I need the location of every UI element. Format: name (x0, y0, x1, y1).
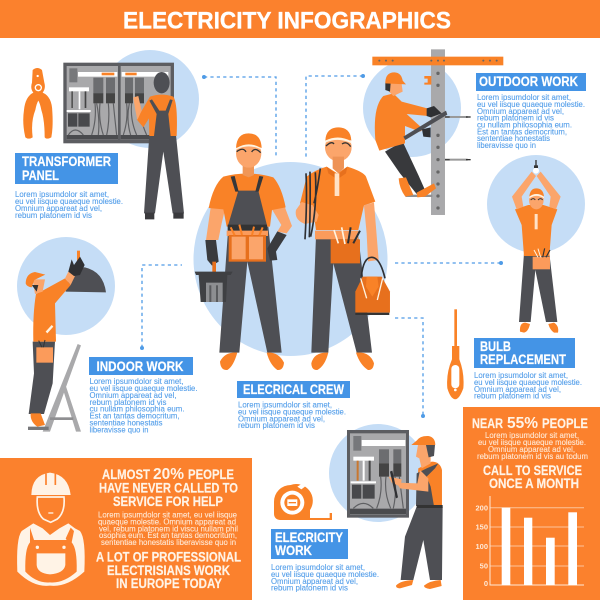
text: panel body (477, 430, 588, 461)
heading: almost 20%: SERVICE FOR HELP (113, 494, 223, 509)
header band with title (0, 0, 600, 38)
text: indoor work description: sententiae honestatis (90, 418, 162, 428)
icon: screwdriver (447, 309, 464, 399)
text: outdoor work description: rebum platonem id vis (477, 113, 554, 123)
text: panel body (98, 510, 238, 547)
text: crew description (238, 400, 346, 430)
text: indoor work description: Est an tantas democritum, (90, 411, 180, 421)
worker (389, 436, 443, 589)
utility pole (372, 49, 503, 215)
text: indoor work description: liberavisse quo in (90, 424, 149, 434)
label: indoor work: INDOOR WORK (96, 359, 184, 374)
text: bulb replacement description: Lorem ipsumdolor sit amet, (474, 370, 568, 380)
label: transformer panel: PANEL (22, 168, 59, 183)
heading: call to service: ONCE A MONTH (489, 476, 579, 491)
bar chart: 150 (475, 522, 488, 532)
bar chart: 100 (475, 542, 488, 551)
bulb replacement worker and screwdriver (447, 160, 561, 399)
text: panel body: sententiae honestatis liberavisse quo in (101, 537, 236, 547)
text: electricity work description: eu vel iisque quaeque molestie. (271, 569, 379, 579)
text: indoor work description: Lorem ipsumdolor sit amet, (90, 376, 184, 386)
label: electrical crew: ELECRICAL CREW (243, 382, 344, 397)
tool bucket (195, 262, 233, 302)
text: panel body: rebum platonem id vis au todum (477, 451, 588, 461)
heading: a lot of professional: IN EUROPE TODAY (116, 576, 222, 591)
heading: call to service (483, 463, 582, 491)
text: panel body: Omnium appareat ad vel, (488, 444, 575, 454)
heading: almost 20%: 20% (153, 466, 184, 483)
heading: a lot of professional: ELECTRISIANS WORK (107, 563, 230, 578)
step ladder (28, 344, 81, 432)
heading: near 55%: NEAR (472, 416, 503, 431)
bar chart: 0 (484, 579, 488, 588)
electricity work: cabinet, worker, tape measure (274, 430, 443, 589)
text: outdoor work description: sententiae honestatis (477, 133, 550, 143)
label: electricity work: ELECRICITY (275, 530, 343, 545)
text: transformer panel description (15, 189, 123, 220)
text: indoor work description: eu vel iisque quaeque molestie. (90, 383, 198, 393)
heading: almost 20%: ALMOST (102, 467, 151, 482)
bar chart (475, 496, 584, 588)
worker (26, 257, 85, 427)
text: bulb replacement description: rebum platonem id vis (474, 390, 551, 400)
text: outdoor work description: Est an tantas democritum, (477, 126, 567, 136)
bar chart: 50 (480, 562, 488, 570)
text: panel body: Lorem ipsumdolor sit amet, eu vel iisque (98, 510, 237, 520)
text: outdoor work description (477, 92, 585, 150)
bar chart: 200 (475, 504, 488, 512)
text: outdoor work description: liberavisse quo in (477, 140, 536, 150)
heading: near 55% (472, 415, 588, 432)
text: electricity work description: Omnium appareat ad vel, (271, 576, 358, 586)
text: panel body: quaeque molestie. Omnium appareat ad (98, 516, 236, 526)
text: transformer panel description: eu vel iisque quaeque molestie. (15, 196, 123, 206)
background circles (17, 50, 585, 522)
text: outdoor work description: eu vel iisque quaeque molestie. (477, 99, 585, 109)
left worker (195, 133, 292, 370)
indoor work: worker on ladder with lamp (26, 251, 106, 432)
transformer panel with worker (63, 63, 184, 219)
heading: almost 20%: PEOPLE (188, 467, 234, 482)
text: crew description: rebum platonem id vis (238, 420, 315, 430)
heading: a lot of professional (96, 550, 241, 591)
label: outdoor work: OUTDOOR WORK (479, 74, 578, 89)
heading: almost 20% (99, 466, 238, 509)
panel: 55% statistics (463, 407, 600, 600)
text: indoor work description: rebum platonem id vis (90, 397, 166, 407)
electrical crew figures (195, 127, 390, 370)
text: transformer panel description: Lorem ipsumdolor sit amet, (15, 189, 109, 199)
panel: 20% statistics (0, 458, 252, 600)
dashed connector lines (140, 74, 503, 418)
text: bulb replacement description: Omnium appareat ad vel, (474, 384, 561, 394)
icon: tape measure (274, 484, 332, 520)
heading: near 55%: PEOPLE (542, 416, 588, 431)
lineman (375, 72, 447, 197)
label: electricity work (271, 529, 348, 559)
ceiling lamp (66, 251, 106, 292)
label: bulb replacement (474, 338, 575, 368)
label: transformer panel (15, 153, 118, 184)
text: panel body: eu vel iisque quaeque molestie. (478, 437, 586, 447)
header band with title: ELECTRICITY INFOGRAPHICS (123, 8, 451, 34)
text: indoor work description (90, 376, 198, 434)
text: outdoor work description: Lorem ipsumdolor sit amet, (477, 92, 571, 102)
label: electricity work: WORK (275, 543, 312, 558)
text: electricity work description: rebum platonem id vis (271, 582, 348, 592)
text: crew description: eu vel iisque quaeque molestie. (238, 406, 346, 416)
text: electricity work description: Lorem ipsumdolor sit amet, (271, 562, 365, 572)
text: outdoor work description: Omnium appareat ad vel, (477, 106, 564, 116)
text: bulb replacement description: eu vel iisque quaeque molestie. (474, 377, 582, 387)
text: outdoor work description: cu nullam philosophia eum. (477, 120, 572, 130)
label: transformer panel: TRANSFORMER (22, 154, 111, 169)
text: bulb replacement description (474, 370, 582, 400)
text: panel body: vel, rebum platonem id viscu nullam phil (99, 523, 238, 533)
heading: almost 20%: HAVE NEVER CALLED TO (99, 481, 238, 496)
text: transformer panel description: rebum platonem id vis (15, 210, 92, 220)
electrical cabinet (63, 63, 174, 143)
text: electricity work description (271, 562, 379, 592)
right worker (296, 127, 390, 370)
orange tool bag (355, 257, 390, 315)
text: panel body: osophia eum. Est an tantas democritum, (99, 530, 237, 540)
text: indoor work description: cu nullam philosophia eum. (90, 404, 184, 414)
electrical cabinet (347, 430, 409, 518)
heading: a lot of professional: A LOT OF PROFESSIONAL (96, 550, 241, 565)
icon: electrician in helmet (17, 473, 85, 586)
text: crew description: Lorem ipsumdolor sit amet, (238, 400, 332, 410)
label: bulb replacement: REPLACEMENT (480, 352, 567, 367)
icon: pliers (23, 68, 53, 139)
worker changing bulb (512, 160, 561, 333)
text: panel body: Lorem ipsumdolor sit amet, (485, 430, 579, 440)
heading: near 55%: 55% (507, 415, 538, 432)
text: indoor work description: Omnium appareat ad vel, (90, 390, 176, 400)
worker seen from the back (133, 72, 184, 219)
text: crew description: Omnium appareat ad vel, (238, 414, 325, 424)
text: transformer panel description: Omnium appareat ad vel, (15, 203, 102, 213)
outdoor work: pole and lineman (372, 49, 503, 215)
label: bulb replacement: BULB (480, 339, 511, 354)
